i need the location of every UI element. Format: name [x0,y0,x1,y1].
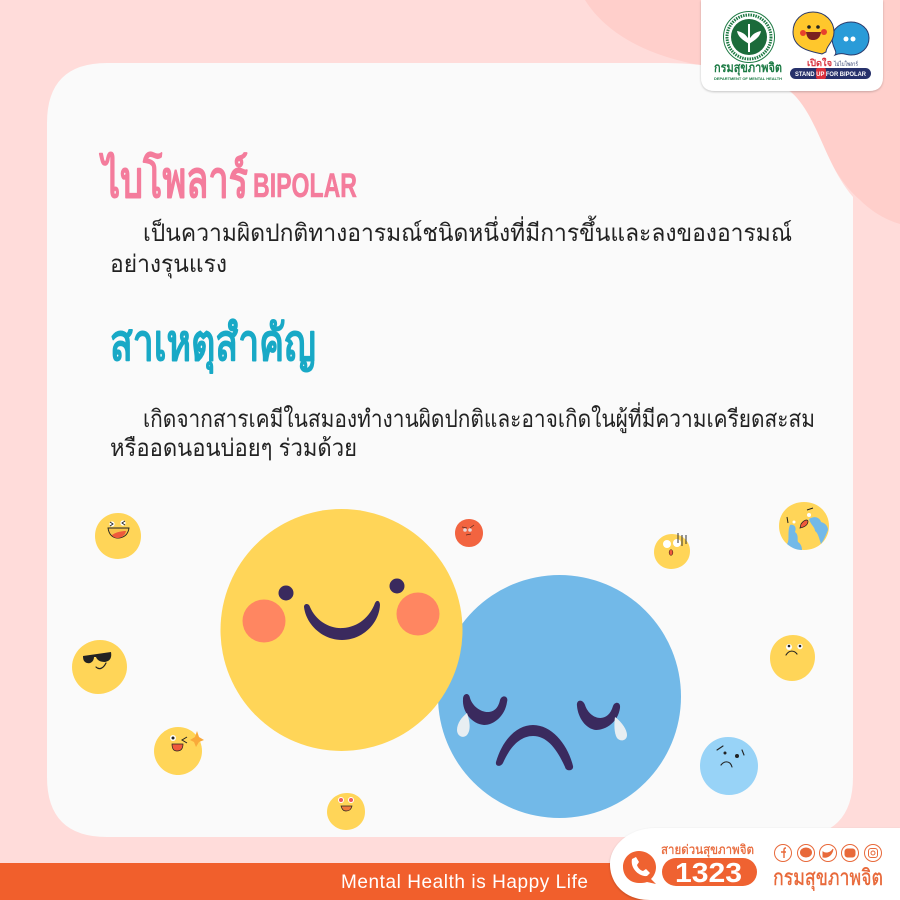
logo text [714,60,782,81]
sad blue face [438,575,681,818]
text block: causes: หรืออดนอนบ่อยๆ ร่วมด้วย [110,435,357,462]
hotline label: สายด่วนสุขภาพจิต [661,842,754,858]
emoji: heart eyes [327,793,365,830]
emoji: angry red [455,519,483,547]
hotline number [662,857,757,888]
footer bar [0,863,660,900]
logo panel [701,0,883,91]
logo text: DEPARTMENT OF MENTAL HEALTH [714,76,782,81]
emoji: laughing [95,513,141,559]
footer slogan: Mental Health is Happy Life [341,872,588,893]
text block: definition [110,215,792,279]
hotline panel [610,828,900,900]
icon: phone bubble [623,851,656,884]
logo: stand up for bipolar [790,12,871,79]
happy yellow face [220,509,462,751]
emoji: winking [154,727,204,775]
logo: stand up for bipolar: เปิดใจ [807,57,832,68]
logo: stand up for bipolar: ไม่ไบโพลาร์ [833,60,859,68]
title: bipolar: BIPOLAR [253,167,357,205]
text block: causes [110,402,815,462]
emoji: sunglasses [72,640,127,694]
heading: main causes: สาเหตุสำคัญ [110,315,316,373]
text block: definition: เป็นความผิดปกติทางอารมณ์ชนิดหนึ่งที่มีการขึ้นและลงของอารมณ์ [143,215,792,247]
emoji: shocked [654,533,690,569]
panel: main card [47,63,853,837]
social icons [774,844,882,862]
title: bipolar: ไบโพลาร์ [99,152,248,208]
emoji: worried yellow [770,635,815,681]
emoji: crying [779,502,829,550]
text block: definition: อย่างรุนแรง [110,251,227,279]
logo: department of mental health seal [724,12,774,62]
logo text: กรมสุขภาพจิต [714,60,782,76]
emoji: worried blue [700,737,758,795]
text block: causes: เกิดจากสารเคมีในสมองทำงานผิดปกติและอาจเกิดในผู้ที่มีความเครียดสะสม [143,402,815,434]
hotline number: 1323 [675,857,742,888]
logo: stand up for bipolar: STAND UP FOR BIPOLAR [795,71,866,78]
